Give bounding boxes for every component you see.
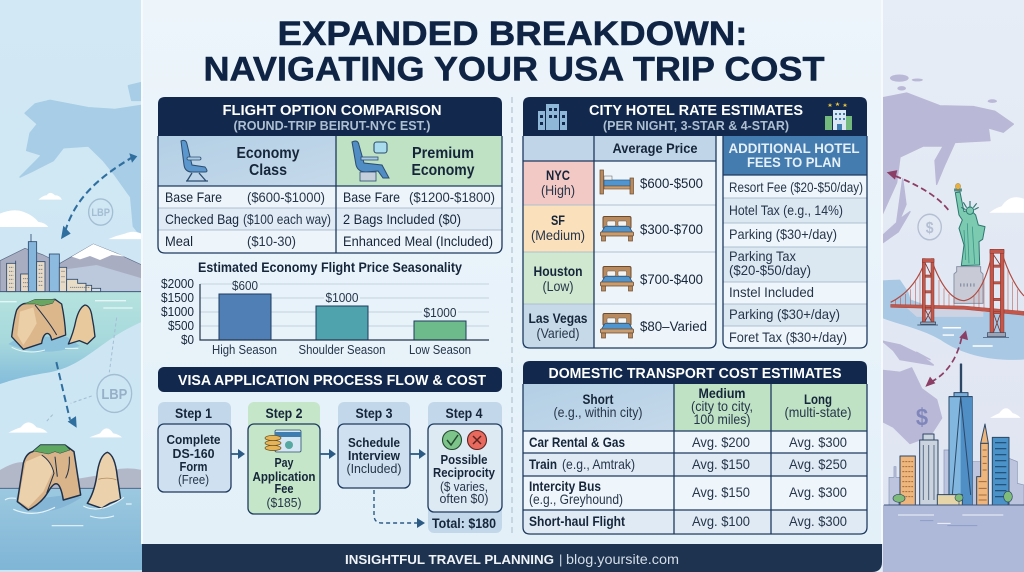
transport rows: (e.g., Amtrak) [562,456,635,472]
step 1: Form [180,459,208,474]
row: SF: $300-$700 [640,221,703,237]
mountains [0,244,142,292]
skyline buildings [7,234,101,292]
transport rows: Avg. $150 [692,456,750,472]
transport rows: Car Rental & Gas [529,434,625,450]
bar chart: economy flight price seasonality [161,260,489,357]
cloud [989,197,1024,213]
right sky and map layer [880,0,1024,572]
row: Las Vegas: Las Vegas [528,310,588,326]
panel: flight option comparison [158,97,502,253]
footer band: blog.yoursite.com [566,552,679,567]
row: Houston: Houston [534,263,582,279]
bar: shoulder season: $1000 [326,290,358,305]
bridge deck [891,304,1024,315]
arrow: step 2 to 3 [320,449,336,459]
icon: bed [600,216,634,241]
transport rows: Avg. $100 [692,513,750,529]
clouds, upper [0,193,142,239]
badge: LBP large [97,374,132,412]
footer band [142,544,882,572]
row: NYC: $600-$500 [640,175,703,191]
Raouche rock, upper [8,299,95,352]
icon: cross mark [468,430,486,450]
sea: bay and shoreline [0,291,143,384]
panel: visa application process [158,367,502,533]
flight fare rows: ($10-30) [247,233,296,249]
Raouche rock, lower [5,445,132,526]
flight fare rows [158,189,502,249]
hotel header [523,97,867,136]
statue and bridge layer [891,183,1024,337]
panel: domestic transport costs [523,361,867,534]
chart title: Estimated Economy Flight Price Seasonality [198,260,462,275]
additional hotel fees list: Parking ($30+/day) [729,226,837,242]
icon: economy seat [181,140,208,181]
flight fare rows: Checked Bag [165,211,239,227]
row: NYC [541,167,703,198]
icon: premium seat [352,141,389,181]
title: NAVIGATING YOUR USA TRIP COST [204,50,825,88]
step 3: Interview [348,448,401,463]
row: Houston: (Low) [542,278,574,294]
step 4: ($ varies, [440,479,488,494]
badge: dollar: $ [926,220,934,237]
step 1 [158,402,231,492]
column headings: Long [804,391,832,407]
step 3: Schedule [348,435,400,450]
map: small islands [890,74,997,103]
left illustration: Lebanon scene [0,0,145,572]
column headings: 100 miles) [694,411,750,427]
bar: low season: $1000 [424,305,456,320]
icon: dollar sign: $ [916,403,928,430]
transport rows: Avg. $250 [789,456,847,472]
flight fare rows: 2 Bags Included ($0) [343,211,461,227]
step 4 [428,402,502,533]
flight panel header [158,97,502,136]
center column divider [511,97,513,535]
flight fare rows: Meal [165,233,193,249]
step 4: Total: $180 [432,515,496,531]
column headings [523,384,867,431]
icon: city hotel [538,104,567,130]
arrow: dashed interview to total [374,490,425,528]
additional hotel fees list: Parking ($30+/day) [729,306,840,322]
icon: starred hotel [825,102,852,130]
additional hotel fees list: ($20-$50/day) [729,262,811,278]
y axis labels [161,276,194,347]
transport table borders [523,384,867,534]
transport rows: Avg. $200 [692,434,750,450]
bridge towers [922,249,1004,333]
panel: city hotel rates [523,97,867,348]
additional hotel fees list: Foret Tax ($30+/day) [729,329,847,345]
flight panel header: FLIGHT OPTION COMPARISON [222,103,442,119]
transport header: DOMESTIC TRANSPORT COST ESTIMATES [548,366,842,382]
column headings: (city to city, [691,398,753,414]
row: Las Vegas [528,310,707,341]
map: New Guinea and Australia silhouettes [883,341,942,443]
premium economy heading: Economy [412,162,475,179]
economy class heading [158,136,336,186]
arrow: dashed curve to map [65,158,132,232]
icon: coins and card [265,430,301,452]
y axis labels: $1500 [161,290,194,305]
map: Alaska silhouette [20,82,143,239]
icon: bed [600,266,634,291]
cloud [990,408,1021,418]
additional hotel fees list: Hotel Tax (e.g., 14%) [729,202,843,218]
background blocks [889,450,1024,505]
column headings: (e.g., within city) [554,404,642,420]
Golden Gate Bridge [891,249,1024,337]
clouds, lower [8,422,122,437]
hotel table [523,136,716,348]
bridge tower bases [921,322,1006,337]
row: Houston [534,263,703,294]
premium economy heading [336,136,502,186]
badge: LBP: LBP [91,208,110,219]
column headings: Medium [698,385,746,401]
transport rows: Intercity Bus [529,478,601,494]
flight panel header: (ROUND-TRIP BEIRUT-NYC EST.) [234,119,430,133]
row: Las Vegas: (Varied) [536,325,580,341]
y axis labels: $2000 [161,276,194,291]
row: SF [531,212,703,243]
transport rows: Avg. $300 [789,513,847,529]
transport rows [524,434,866,533]
step 2: ($185) [266,495,302,510]
transport header [523,361,867,384]
title [204,15,825,88]
flight fare rows: ($100 each way) [243,211,331,227]
step 4: Reciprocity [433,465,496,480]
step 2: Application [252,469,316,484]
arrow: step 3 to 4 [410,449,426,459]
additional hotel fees list: Parking Tax [729,248,796,264]
column headings: (multi-state) [784,404,852,420]
flight fare rows: ($1200-$1800) [409,189,495,205]
flight fare rows: ($600-$1000) [247,189,325,205]
arrow: step 1 to 2 [231,449,245,459]
step 2: Pay [274,455,294,470]
step 3: Step 3 [356,405,393,421]
step 1: DS-160 [172,446,214,461]
bar: shoulder season: Shoulder Season [298,342,386,357]
footer band: | [559,552,562,567]
arrow: dashed, to Asia [893,175,948,210]
icon: check mark [442,430,462,450]
badge: LBP [89,199,113,225]
bar: low season: Low Season [409,342,471,357]
bar: low season [409,305,471,357]
bar: high season: $600 [232,278,258,293]
flight fare rows: Base Fare [343,189,400,205]
step 2 [248,402,320,514]
row: SF: SF [551,212,565,228]
bar: high season [212,278,277,357]
bar: high season: High Season [212,342,277,357]
river: foreground [883,505,1024,572]
transport rows: Avg. $300 [789,484,847,500]
left sky and map layer [0,0,145,572]
flight table borders [158,136,502,253]
shadow strip under bridge deck [903,305,983,317]
bay [883,280,1024,360]
flight fare rows: Base Fare [165,189,222,205]
map: Russia and Japan silhouettes [883,93,1013,243]
sea: foreground [0,488,142,570]
premium economy heading: Premium [412,145,474,162]
additional hotel fees list: Instel Included [729,284,814,300]
row: NYC: (High) [541,182,575,198]
badge: dollar [918,214,941,240]
column headings: Short [582,391,614,407]
step 4: Step 4 [446,405,483,421]
economy class heading: Economy [236,145,300,162]
step 2: Step 2 [266,405,303,421]
footer band: INSIGHTFUL TRAVEL PLANNING [345,552,554,567]
icon: bed [600,314,634,338]
arrow: dashed, double-headed [930,338,962,383]
step 1: Complete [166,432,220,447]
water ripples [898,515,1003,523]
additional hotel fees list [723,136,867,348]
economy class heading: Class [249,162,287,179]
towers [900,364,1009,505]
hotel header: (PER NIGHT, 3-STAR & 4-STAR) [603,119,789,133]
transport rows: Avg. $300 [789,434,847,450]
title: EXPANDED BREAKDOWN: [278,15,748,53]
suspension cables [891,257,1024,313]
window stripes [902,462,913,497]
arrow: dashed, downward [56,362,70,420]
trees [893,491,1012,505]
step 1: Step 1 [175,405,212,421]
step 3 [338,402,410,488]
additional hotel fees list: Resort Fee ($20-$50/day) [729,179,863,195]
hotel header: CITY HOTEL RATE ESTIMATES [589,103,803,119]
y axis labels: $0 [181,332,194,347]
y axis labels: $1000 [161,304,194,319]
hotel table: Average Price [612,140,698,156]
step 4: Possible [440,452,488,467]
step 4: often $0) [440,491,488,506]
badge: LBP large: LBP [101,386,128,403]
row: NYC: NYC [546,167,570,183]
New York skyline [884,364,1024,526]
bar: shoulder season [298,290,386,357]
transport rows: (e.g., Greyhound) [529,491,623,507]
transport rows: Avg. $150 [692,484,750,500]
additional hotel fees list: ADDITIONAL HOTEL [728,140,860,156]
step 1: (Free) [178,472,209,487]
Beirut skyline and upper rocks [0,234,142,352]
visa header: VISA APPLICATION PROCESS FLOW & COST [178,373,486,389]
step 2: Fee [274,481,294,496]
y axis labels: $500 [168,318,194,333]
row: Houston: $700-$400 [640,271,703,287]
flight fare rows: Enhanced Meal (Included) [343,233,493,249]
distant hills [0,462,142,489]
lower Raouche scene [0,422,142,570]
icon: side-view bed [600,170,634,194]
row: SF: (Medium) [531,227,585,243]
visa header [158,367,502,392]
skyline windows [9,265,90,287]
step 3: (Included) [346,461,402,476]
transport rows: Short-haul Flight [529,513,625,529]
transport rows: Train [529,456,557,472]
row: Las Vegas: $80–Varied [640,318,707,334]
additional hotel fees list: FEES TO PLAN [747,154,841,170]
Statue of Liberty [954,183,985,303]
central panel background [142,0,882,572]
right illustration: USA scene [880,0,1024,572]
